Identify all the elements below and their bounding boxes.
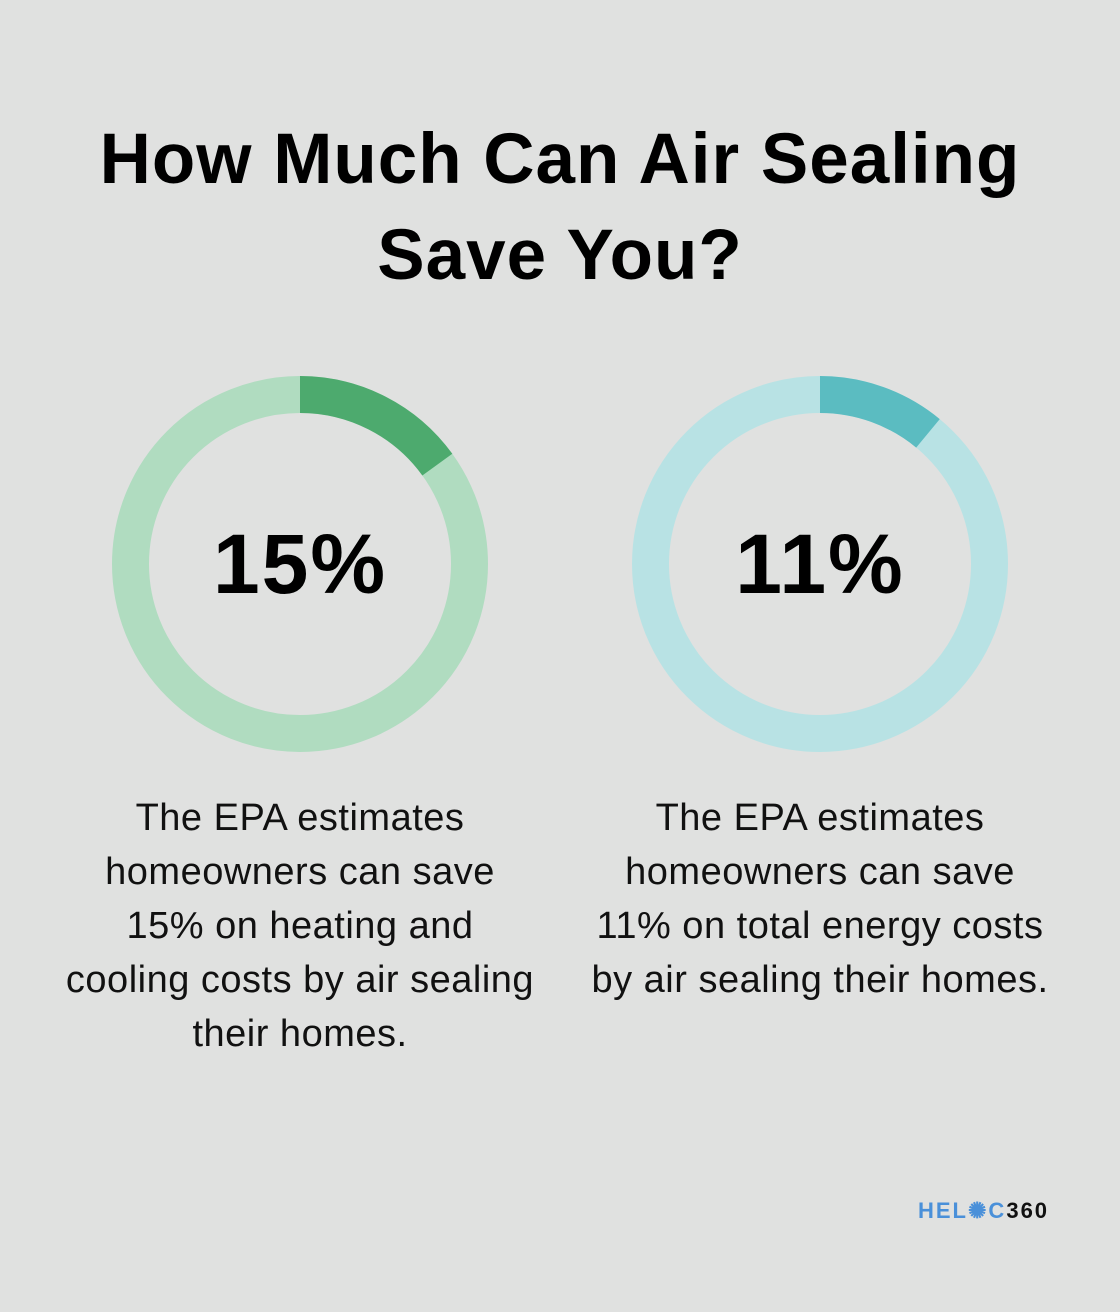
text: right description: 11% on total energy costs	[597, 905, 1043, 947]
panel: 15% donut	[112, 376, 488, 752]
panel: 11% donut	[632, 376, 1008, 752]
text: right description	[591, 797, 1049, 1001]
title: How Much Can Air Sealing	[100, 120, 1020, 199]
text: left description: homeowners can save	[105, 851, 495, 893]
text: left description: cooling costs by air sealing	[66, 959, 534, 1001]
text: right description: by air sealing their homes.	[591, 959, 1049, 1001]
text: right description: The EPA estimates	[656, 797, 984, 839]
text: left description: 15% on heating and	[126, 905, 474, 947]
panel: 15% donut: 15%	[213, 517, 387, 611]
text: left description: The EPA estimates	[136, 797, 464, 839]
panel: 11% donut: 11%	[735, 517, 905, 611]
title: Save You?	[377, 216, 743, 295]
logo: HEL✺C360	[918, 1198, 1049, 1223]
text: left description: their homes.	[192, 1013, 408, 1055]
title	[100, 120, 1020, 295]
text: right description: homeowners can save	[625, 851, 1015, 893]
text: left description	[66, 797, 534, 1055]
